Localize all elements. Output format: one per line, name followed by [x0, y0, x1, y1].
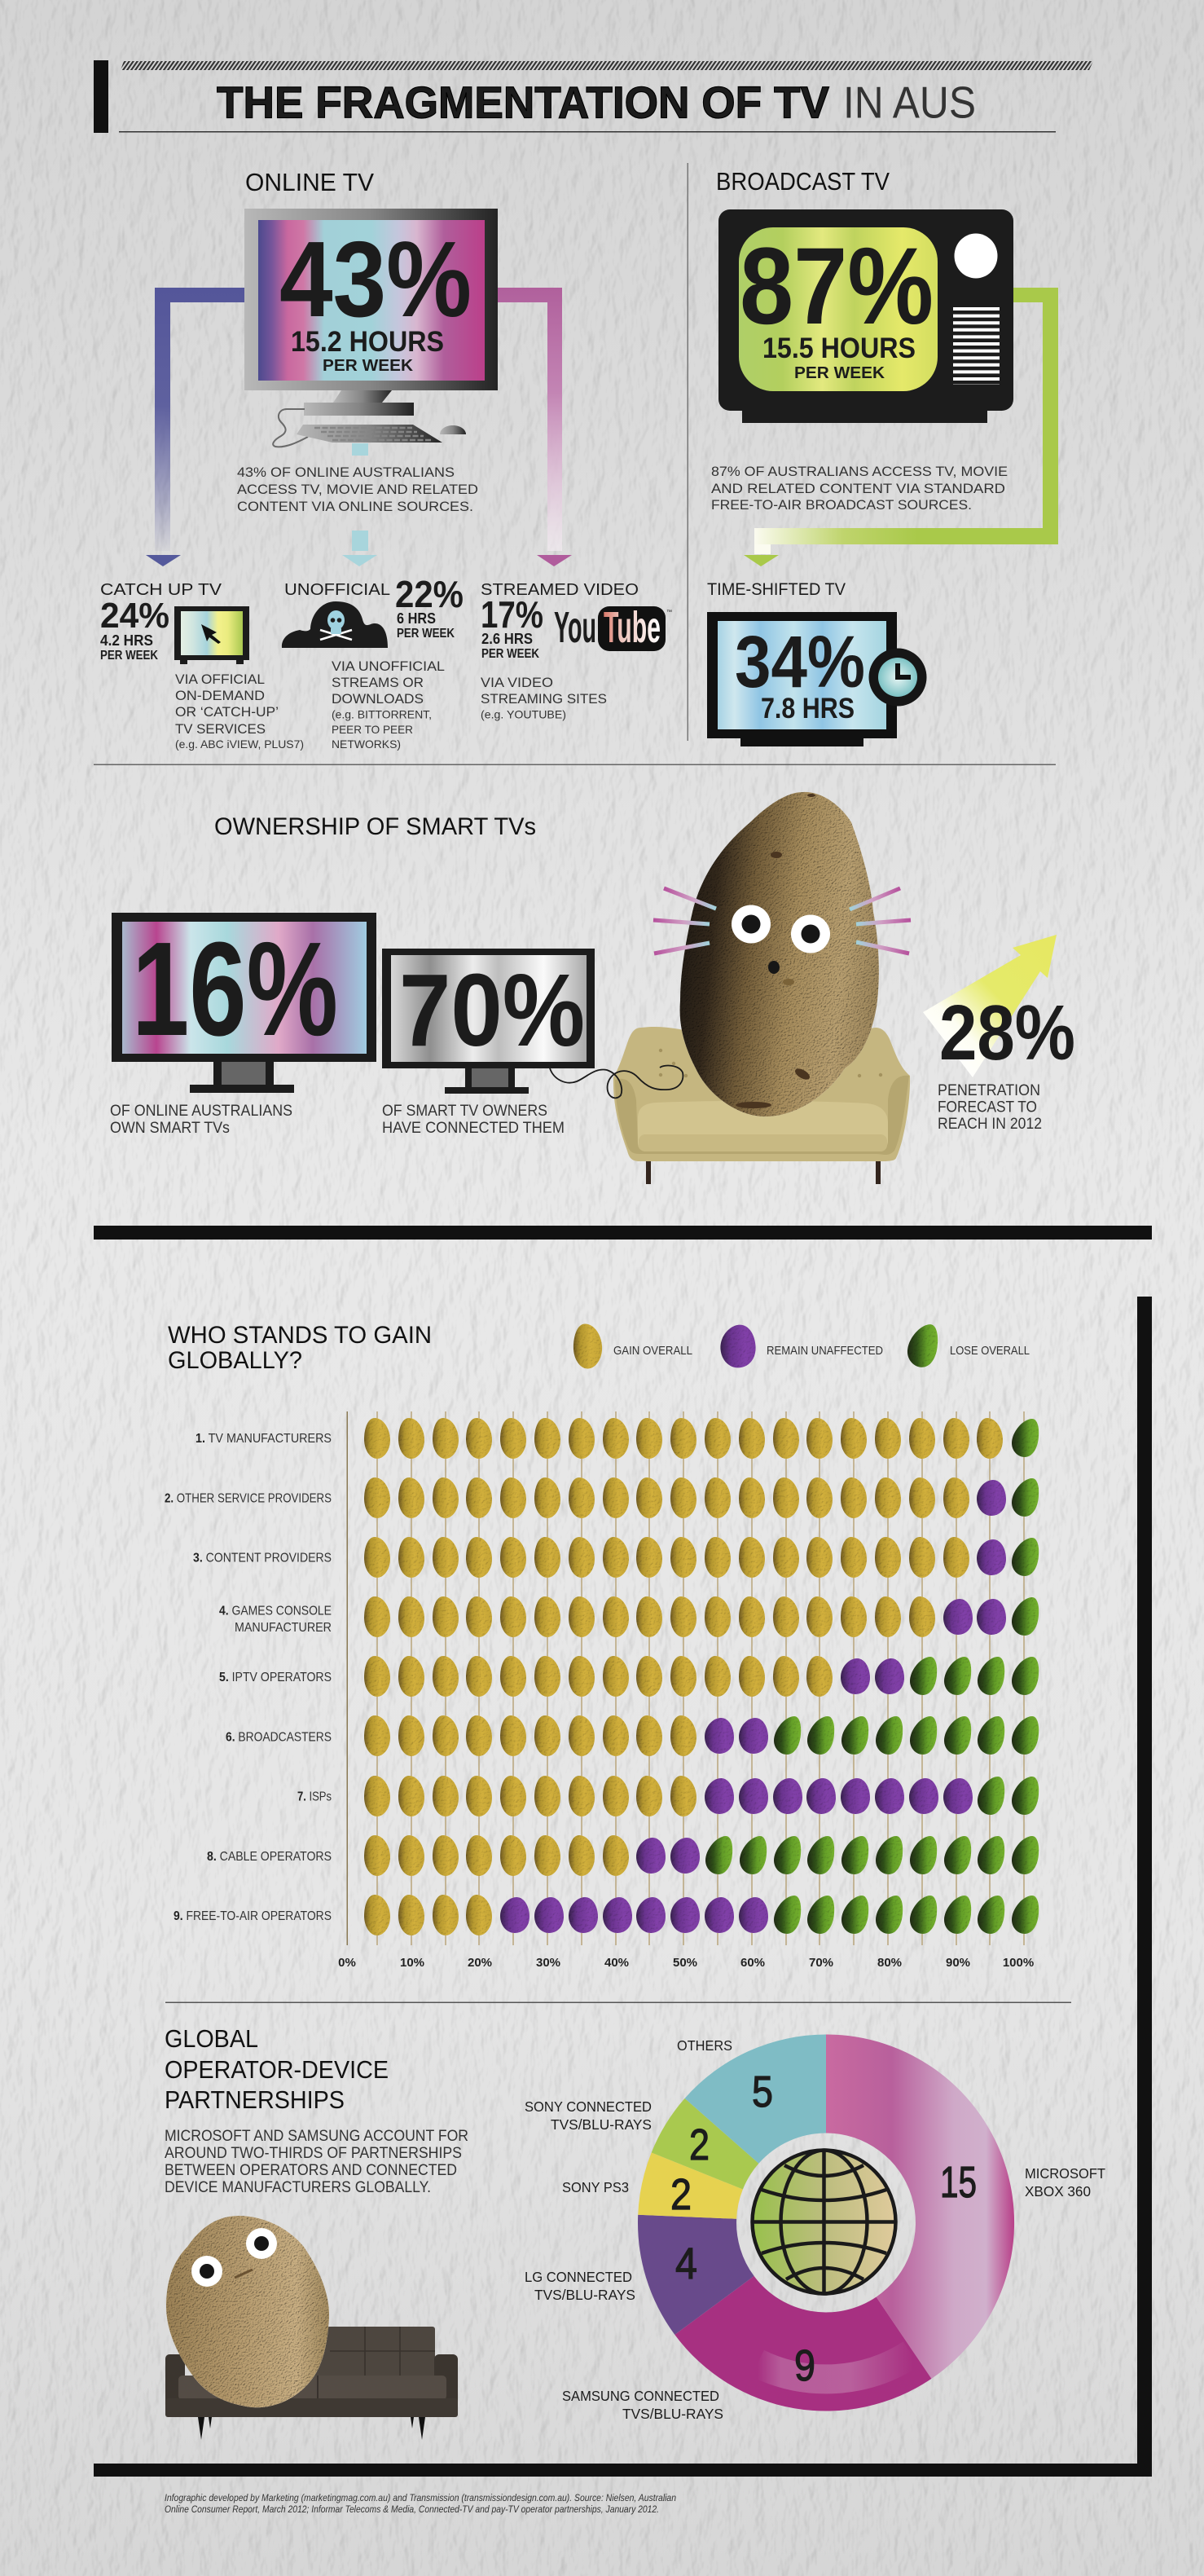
slice labels: SONY CONNECTED [525, 2098, 652, 2115]
panel: unofficial: UNOFFICIAL [284, 580, 390, 599]
row labels: MANUFACTURER [235, 1621, 332, 1635]
axis labels [338, 1956, 1034, 1970]
heading: partnerships: PARTNERSHIPS [165, 2085, 345, 2114]
stat: 87 percent: 15.5 HOURS [762, 332, 916, 364]
title: IN AUS [843, 78, 976, 127]
legend [573, 1323, 938, 1369]
text: streamed description [481, 675, 607, 720]
panel: time-shifted TV: 34% [735, 622, 865, 703]
heading: who stands to gain globally: WHO STANDS TO GAIN [168, 1322, 432, 1349]
text: broadcast description: AND RELATED CONTENT VIA STANDARD [711, 482, 1005, 496]
stat: 28 percent forecast: PENETRATION [938, 1082, 1040, 1099]
text: unofficial description [332, 658, 445, 751]
stat: 28 percent forecast: FORECAST TO [938, 1099, 1037, 1116]
potato eyes and mouth [732, 905, 830, 974]
row labels: 8. CABLE OPERATORS [207, 1850, 332, 1864]
slice: Samsung connected TVs/Blu-rays [675, 2276, 931, 2411]
panel: time-shifted TV: TIME-SHIFTED TV [707, 579, 846, 599]
arrow: to unofficial [342, 443, 377, 566]
panel: streamed video: STREAMED VIDEO [481, 580, 639, 599]
axis labels: 10% [400, 1956, 424, 1970]
text: catch up description [175, 672, 304, 751]
text: streamed description: STREAMING SITES [481, 691, 607, 707]
footer credits: Infographic developed by Marketing (marketingmag.com.au) and Transmission (transmissiondesign.com.au). Source: Nielsen, Australian [165, 2492, 676, 2503]
text: unofficial description: PEER TO PEER [332, 723, 413, 736]
icon: YouTube logo: Tube [604, 603, 661, 652]
slice labels: MICROSOFT [1025, 2165, 1105, 2182]
axis labels: 70% [809, 1956, 833, 1970]
illustration: couch potato [653, 792, 911, 1116]
legend labels [613, 1344, 1030, 1358]
stat: 87 percent: 87% [740, 226, 934, 347]
heading: partnerships [165, 2024, 389, 2114]
text: online description: ACCESS TV, MOVIE AND RELATED [237, 482, 478, 497]
arrow: to streamed video [498, 288, 572, 566]
text: catch up description: VIA OFFICIAL [175, 672, 265, 687]
potato whiskers [653, 888, 911, 953]
text: partnerships description: BETWEEN OPERATORS AND CONNECTED [165, 2162, 457, 2179]
slice values: 15 [940, 2158, 977, 2207]
row 3: content providers [364, 1537, 1039, 1578]
row 5: IPTV operators [364, 1656, 1039, 1697]
slice labels: OTHERS [677, 2037, 732, 2054]
row 6: broadcasters [364, 1715, 1039, 1756]
panel: time-shifted TV [707, 579, 927, 746]
text: unofficial description: VIA UNOFFICIAL [332, 658, 445, 674]
text: monitor captions [110, 1103, 565, 1137]
section: global operator-device partnerships [165, 2024, 1105, 2440]
stat: 28 percent forecast: 28% [939, 989, 1075, 1077]
panel: unofficial [282, 573, 464, 751]
arrow: to catch up TV [146, 288, 244, 566]
chart: 16 percent monitor: 16% [132, 914, 338, 1063]
text: broadcast description: 87% OF AUSTRALIANS ACCESS TV, MOVIE [711, 465, 1008, 479]
illustration: dark sofa [165, 2327, 458, 2440]
heading: who stands to gain globally: GLOBALLY? [168, 1347, 302, 1374]
heading: ownership of smart TVs: OWNERSHIP OF SMART TVs [214, 813, 536, 840]
icon: YouTube logo: ™ [666, 610, 672, 615]
slice labels: TVS/BLU-RAYS [551, 2116, 652, 2133]
panel: catch up TV: 4.2 HRS [100, 632, 153, 649]
panel: unofficial: PER WEEK [397, 627, 455, 641]
row labels: 7. ISPs [297, 1790, 332, 1804]
title: THE FRAGMENTATION OF TV [217, 78, 829, 127]
text: online description: 43% OF ONLINE AUSTRALIANS [237, 465, 455, 480]
text: streamed description: (e.g. YOUTUBE) [481, 707, 566, 720]
legend labels: GAIN OVERALL [613, 1344, 692, 1358]
panel: catch up TV [100, 580, 304, 751]
stat: 43 percent: 43% [279, 219, 472, 339]
heading: online TV: ONLINE TV [245, 168, 374, 196]
panel: streamed video: 17% [481, 593, 543, 636]
axis labels: 50% [673, 1956, 697, 1970]
heading: partnerships: GLOBAL [165, 2024, 258, 2053]
text: online description: CONTENT VIA ONLINE SOURCES. [237, 500, 473, 514]
text: catch up description: (e.g. ABC iVIEW, PLUS7) [175, 738, 304, 751]
heading: who stands to gain globally [168, 1322, 432, 1374]
text: catch up description: TV SERVICES [175, 721, 266, 737]
text: streamed description: VIA VIDEO [481, 675, 553, 690]
heading: partnerships: OPERATOR-DEVICE [165, 2055, 389, 2084]
row 8: cable operators [364, 1835, 1039, 1876]
row 1: TV manufacturers [364, 1418, 1039, 1459]
text: unofficial description: DOWNLOADS [332, 691, 424, 707]
chart: potato matrix [364, 1418, 1039, 1935]
illustration: cream sofa [613, 1027, 910, 1184]
text: monitor captions: HAVE CONNECTED THEM [382, 1120, 565, 1137]
slice labels: LG CONNECTED [525, 2269, 632, 2285]
row labels: 3. CONTENT PROVIDERS [193, 1552, 332, 1565]
stat: 87 percent: PER WEEK [794, 364, 885, 382]
row 4: games console manufacturer [364, 1596, 1039, 1637]
text: monitor captions: OWN SMART TVs [110, 1120, 230, 1137]
axis labels: 80% [877, 1956, 902, 1970]
illustration: potato on sofa [166, 2216, 329, 2407]
section: ownership of smart TVs [110, 792, 1075, 1184]
row labels: 5. IPTV OPERATORS [219, 1671, 332, 1684]
icon: desktop computer [244, 209, 498, 447]
text: partnerships description [165, 2128, 468, 2196]
panel: unofficial: 22% [395, 573, 464, 615]
text: partnerships description: AROUND TWO-THIRDS OF PARTNERSHIPS [165, 2145, 462, 2162]
text: broadcast description [711, 465, 1008, 513]
panel: streamed video: 2.6 HRS [481, 630, 533, 647]
slice: others [685, 2034, 826, 2164]
row labels: 1. TV MANUFACTURERS [196, 1432, 332, 1446]
row labels: 9. FREE-TO-AIR OPERATORS [174, 1909, 332, 1923]
text: monitor captions: OF SMART TV OWNERS [382, 1103, 547, 1120]
slice labels: TVS/BLU-RAYS [534, 2287, 635, 2303]
panel: broadcast TV [711, 167, 1058, 566]
slice values: 2 [689, 2120, 710, 2169]
icon: YouTube logo [554, 603, 672, 652]
text: partnerships description: MICROSOFT AND SAMSUNG ACCOUNT FOR [165, 2128, 468, 2145]
icon: YouTube logo: You [554, 603, 596, 652]
text: catch up description: OR ‘CATCH-UP’ [175, 704, 279, 720]
text: catch up description: ON-DEMAND [175, 688, 265, 703]
chart: partnerships donut [525, 2034, 1105, 2422]
stat: 43 percent: 15.2 HOURS [291, 326, 444, 358]
panel: time-shifted TV: 7.8 HRS [761, 693, 855, 724]
slice: Sony connected TVs/Blu-rays [652, 2098, 758, 2189]
stat: 28 percent forecast [938, 989, 1075, 1133]
axis labels: 0% [338, 1956, 356, 1970]
text: unofficial description: (e.g. BITTORRENT, [332, 707, 432, 720]
slice labels: XBOX 360 [1025, 2183, 1091, 2200]
legend labels: REMAIN UNAFFECTED [767, 1344, 883, 1358]
footer credits [165, 2492, 676, 2515]
text: monitor captions: OF ONLINE AUSTRALIANS [110, 1103, 292, 1120]
slice labels: SAMSUNG CONNECTED [562, 2388, 719, 2404]
arrow: to time-shifted TV [744, 288, 1058, 566]
stat: 28 percent forecast: REACH IN 2012 [938, 1116, 1042, 1133]
icon: TV with clock [707, 612, 927, 746]
text: broadcast description: FREE-TO-AIR BROADCAST SOURCES. [711, 498, 972, 513]
arrow: penetration forecast [923, 935, 1057, 1077]
slice values: 4 [675, 2239, 697, 2288]
slice labels: SONY PS3 [562, 2179, 629, 2195]
axis labels: 20% [468, 1956, 492, 1970]
slice: Sony PS3 [638, 2152, 743, 2219]
slice values [670, 2067, 977, 2390]
slice: LG connected TVs/Blu-rays [638, 2215, 754, 2335]
slice values: 9 [794, 2341, 815, 2390]
panel: catch up TV: PER WEEK [100, 649, 159, 663]
slice values: 5 [752, 2067, 773, 2116]
axis labels: 100% [1003, 1956, 1034, 1970]
row labels: 6. BROADCASTERS [226, 1730, 332, 1744]
panel: streamed video: PER WEEK [481, 647, 540, 661]
icon: pirate hat [282, 601, 388, 648]
row labels: 2. OTHER SERVICE PROVIDERS [165, 1491, 332, 1506]
slice values: 2 [670, 2170, 692, 2219]
axis labels: 30% [536, 1956, 560, 1970]
icon: retro television [718, 209, 1013, 423]
chart: 70 percent monitor: 70% [399, 953, 585, 1068]
text: partnerships description: DEVICE MANUFACTURERS GLOBALLY. [165, 2179, 431, 2196]
icon: small TV with cursor [174, 606, 249, 664]
legend labels: LOSE OVERALL [950, 1344, 1030, 1358]
axis labels: 60% [740, 1956, 765, 1970]
axis labels: 90% [946, 1956, 970, 1970]
panel: unofficial: 6 HRS [397, 610, 436, 627]
illustration: connecting cable [550, 1066, 683, 1098]
stat: 43 percent: PER WEEK [323, 357, 414, 375]
panel: catch up TV: 24% [100, 596, 169, 636]
slice labels: TVS/BLU-RAYS [622, 2406, 723, 2422]
icon: globe [753, 2150, 896, 2293]
section: who stands to gain [165, 1322, 1039, 1970]
heading: broadcast TV: BROADCAST TV [716, 167, 890, 196]
footer credits: Online Consumer Report, March 2012; Informar Telecoms & Media, Connected-TV and pay-TV operator partnerships, January 2012. [165, 2503, 659, 2515]
panel: online TV [146, 168, 572, 566]
slice labels [525, 2037, 1105, 2422]
row 7: ISPs [364, 1776, 1039, 1816]
row 2: other service providers [364, 1477, 1039, 1518]
panel: streamed video [481, 580, 672, 720]
row labels: 4. GAMES CONSOLE [219, 1604, 332, 1618]
panel: catch up TV: CATCH UP TV [100, 580, 222, 599]
text: unofficial description: STREAMS OR [332, 675, 424, 690]
text: unofficial description: NETWORKS) [332, 738, 401, 751]
text: online description [237, 465, 478, 514]
slice: Microsoft Xbox 360 [826, 2034, 1014, 2379]
axis labels: 40% [604, 1956, 629, 1970]
row labels [165, 1432, 332, 1923]
header [94, 60, 1093, 133]
row 9: free-to-air operators [364, 1895, 1039, 1935]
